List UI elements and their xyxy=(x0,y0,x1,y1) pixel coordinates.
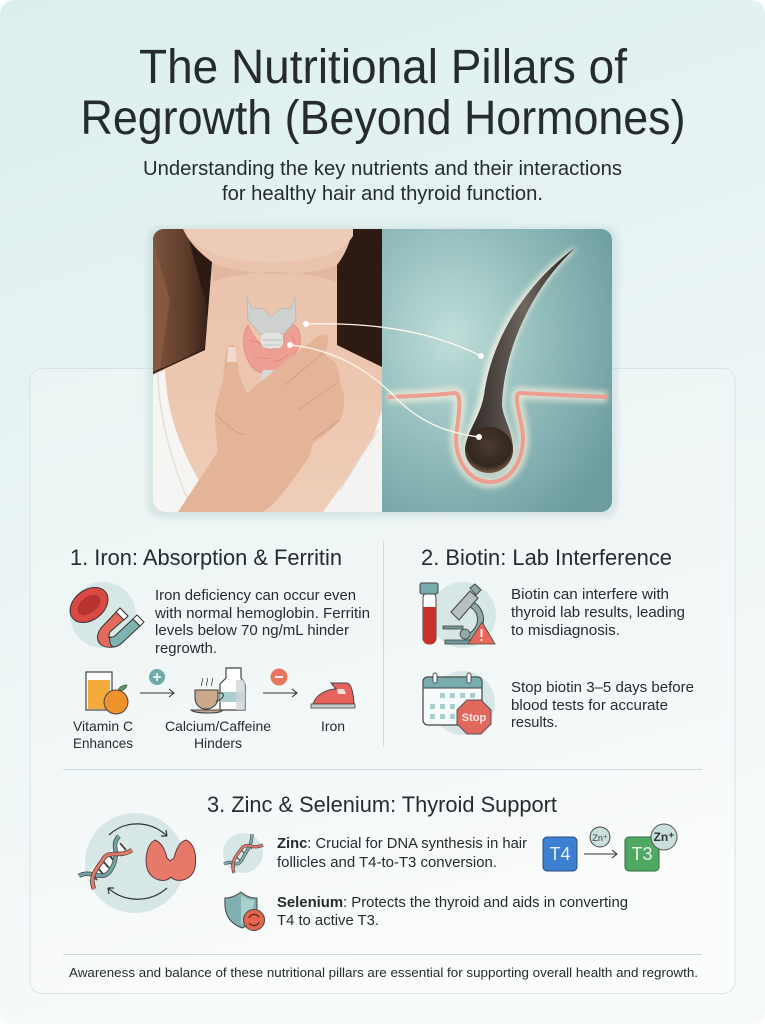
icon: vitamin C juice and orange xyxy=(86,672,128,714)
hero image: thyroid and hair follicle xyxy=(147,226,618,518)
label: calcium and caffeine xyxy=(165,718,271,751)
connector lines xyxy=(287,321,484,440)
illustration: hair follicle xyxy=(382,229,612,512)
shirt xyxy=(153,370,203,512)
icon: iron xyxy=(311,683,355,708)
icon: DNA and thyroid cycle xyxy=(79,813,196,913)
diagram: T4 to T3 conversion: T3 xyxy=(631,844,653,864)
photo: neck with thyroid xyxy=(153,229,382,512)
icon: coffee and milk xyxy=(191,668,245,713)
title: The Nutritional Pillars of xyxy=(139,41,628,94)
iron text block: levels below 70 ng/mL hinder xyxy=(155,623,349,639)
subtitle: Understanding the key nutrients and their interactions xyxy=(143,158,622,180)
subtitle xyxy=(143,158,622,205)
label: iron: Iron xyxy=(321,718,345,734)
panel: content card xyxy=(30,368,735,994)
thyroid gland xyxy=(244,324,300,373)
icon: small DNA xyxy=(223,833,263,873)
iron text block: regrowth. xyxy=(155,641,217,657)
biotin text: interference: thyroid lab results, leading xyxy=(511,605,685,621)
icon: shield with cycle badge xyxy=(225,892,264,930)
hand xyxy=(178,334,344,512)
biotin text: interference: to misdiagnosis. xyxy=(511,623,620,639)
selenium text: Selenium: Protects the thyroid and aids in converting xyxy=(277,895,628,911)
section 1 heading: 1. Iron: Absorption & Ferritin xyxy=(70,545,342,570)
zinc text: Zinc: Crucial for DNA synthesis in hair xyxy=(277,836,527,852)
zinc text: follicles and T4-to-T3 conversion. xyxy=(277,855,497,871)
section 3 heading: 3. Zinc & Selenium: Thyroid Support xyxy=(207,792,557,817)
icon: calendar and stop sign xyxy=(423,671,495,735)
biotin text: stop before tests xyxy=(511,680,694,731)
icon: calendar and stop sign: Stop xyxy=(462,712,486,724)
diagram: T4 to T3 conversion: T4 xyxy=(549,844,571,864)
icon: blood tube and microscope xyxy=(420,582,496,648)
label: calcium and caffeine: Hinders xyxy=(194,735,242,751)
iron text block: Iron deficiency can occur even xyxy=(155,588,356,604)
title: Regrowth (Beyond Hormones) xyxy=(80,92,686,145)
biotin text: stop before tests: blood tests for accurate xyxy=(511,698,668,714)
footer note: Awareness and balance of these nutritional pillars are essential for supporting overall health and regrowth. xyxy=(69,966,698,980)
arrow: enhances xyxy=(140,669,174,697)
icon: red blood cell and magnet xyxy=(63,580,144,648)
label: calcium and caffeine: Calcium/Caffeine xyxy=(165,718,271,734)
biotin text: interference xyxy=(511,587,685,639)
iron text block: with normal hemoglobin. Ferritin xyxy=(154,606,370,622)
arrow: hinders xyxy=(263,668,297,697)
subtitle: for healthy hair and thyroid function. xyxy=(222,183,543,205)
diagram: T4 to T3 conversion xyxy=(543,824,677,871)
biotin text: stop before tests: results. xyxy=(511,715,558,731)
label: vitamin C: Enhances xyxy=(73,735,133,751)
iron text block xyxy=(154,588,370,657)
title xyxy=(80,41,686,145)
diagram: T4 to T3 conversion: Zn⁺ xyxy=(654,830,674,844)
biotin text: interference: Biotin can interfere with xyxy=(511,587,669,603)
selenium text xyxy=(277,895,628,929)
section 2 heading: 2. Biotin: Lab Interference xyxy=(421,545,672,570)
cartilage xyxy=(247,297,296,334)
label: vitamin C xyxy=(73,718,133,751)
selenium text: T4 to active T3. xyxy=(277,913,379,929)
diagram: T4 to T3 conversion: Zn⁺ xyxy=(592,833,608,843)
zinc text xyxy=(277,836,527,871)
biotin text: stop before tests: Stop biotin 3–5 days before xyxy=(511,680,694,696)
label: vitamin C: Vitamin C xyxy=(73,718,133,734)
